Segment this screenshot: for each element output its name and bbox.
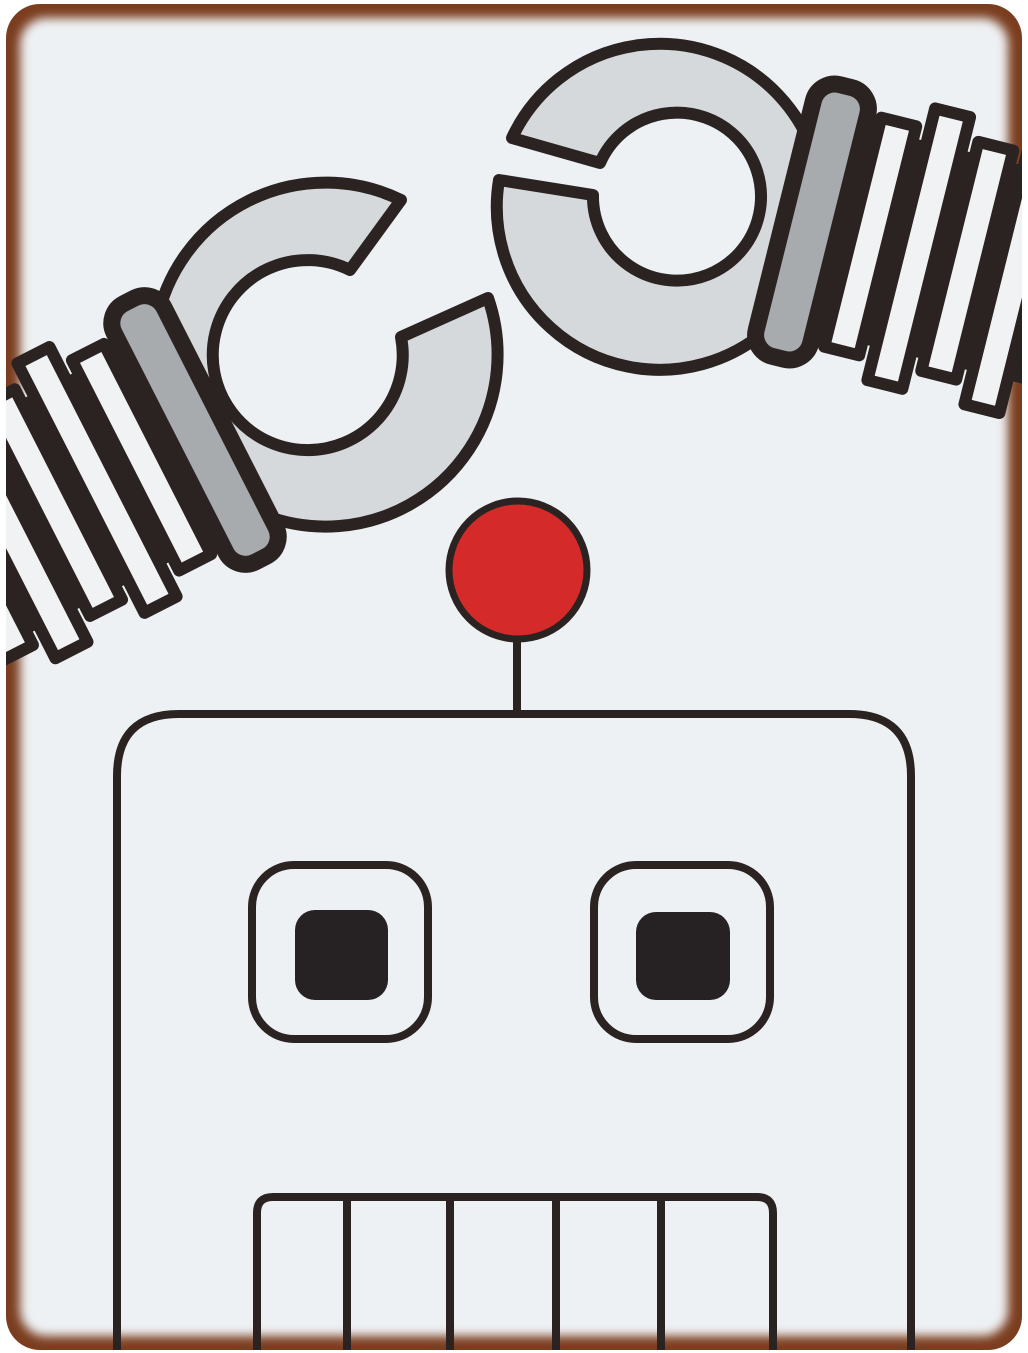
left claw [154, 183, 498, 527]
right eye [594, 865, 770, 1039]
left robot arm with claw [6, 176, 504, 666]
robot head [117, 714, 911, 1353]
mouth [257, 1197, 773, 1353]
right robot arm with claw [497, 44, 1028, 430]
spring segments [6, 338, 218, 666]
right claw [497, 44, 823, 370]
left eye [252, 865, 428, 1039]
spring segments [818, 102, 1022, 419]
collar [751, 79, 873, 365]
collar [104, 288, 286, 572]
antenna [449, 501, 587, 714]
